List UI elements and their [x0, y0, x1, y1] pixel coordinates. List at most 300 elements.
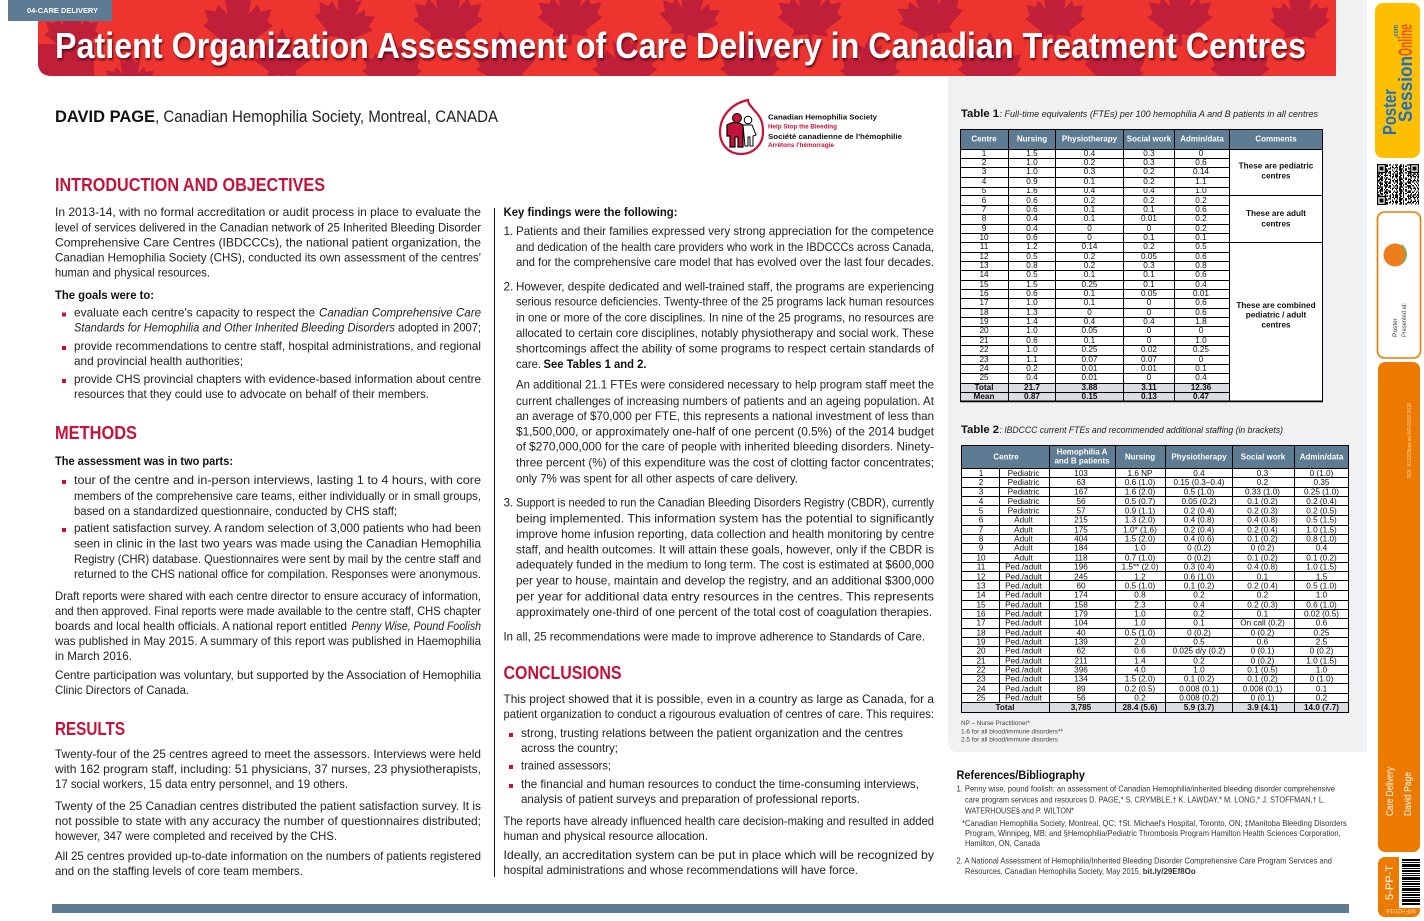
- finding 2: an average of $70,000 per FTE, this represents a national investment of less than: [516, 409, 934, 423]
- table 2 data rows: 56: [1076, 497, 1086, 506]
- table 2 data rows: [976, 469, 1339, 712]
- reference list: Resources, Canadian Hemophilia Society, May 2015,: [965, 867, 1141, 876]
- text block: introduction: human and physical resources.: [55, 266, 210, 280]
- text block: results: 17 social workers, 15 data entry personnel, and 19 others.: [55, 777, 348, 791]
- table 1 data rows: 20: [979, 326, 989, 335]
- logo text: Help Stop the Bleeding: [768, 124, 837, 130]
- finding 2: [504, 280, 935, 486]
- table 2 data rows: Ped./adult: [1005, 656, 1043, 665]
- table 2 data rows: 0.2: [1316, 693, 1328, 702]
- table 2 header row: Physiotherapy: [1171, 452, 1227, 462]
- table 1 data rows: 0: [1147, 326, 1152, 335]
- logo text: Canadian Hemophilia Society: [768, 112, 878, 122]
- table 2 data rows: Ped./adult: [1005, 637, 1043, 646]
- table 1 header row: Admin/data: [1180, 134, 1224, 144]
- category tag: [8, 0, 112, 21]
- text block: goals: The goals were to:: [55, 288, 154, 302]
- panel: results: [54, 718, 481, 878]
- table 2 data rows: 0.1: [1193, 618, 1205, 627]
- finding 3: 3.: [504, 496, 513, 510]
- table 2 data rows: 21: [976, 656, 986, 665]
- text block: conclusions: the financial and human resources to conduct the time-consuming interviews,: [521, 777, 919, 791]
- table 1 data rows: 0.05: [1141, 252, 1157, 261]
- sidebar: presented at box: Presented at:: [1401, 303, 1408, 337]
- table 2 data rows: 0.1 (0.2): [1184, 581, 1215, 590]
- text block: conclusions: Ideally, an accreditation system can be put in place which will be recognized by: [504, 848, 934, 862]
- table 2 data rows: 1: [979, 469, 984, 478]
- table 1 data rows: 0: [1147, 373, 1152, 382]
- heading: methods: METHODS: [55, 422, 137, 443]
- text block: assessment parts: patient satisfaction survey. A random selection of 3,000 patients who had been: [74, 521, 481, 535]
- table 2 data rows: 0.8: [1134, 590, 1146, 599]
- table 1 data rows: 19: [979, 317, 989, 326]
- table 1 data rows: 0: [1087, 224, 1092, 233]
- table 2 data rows: 158: [1074, 600, 1088, 609]
- text block: results: All 25 centres provided up-to-date information on the numbers of patients registered: [55, 849, 481, 863]
- text block: introduction: Comprehensive Care Centres (IBDCCCs), the national patient organization, the: [55, 236, 481, 250]
- table 2 data rows: 0.2 (0.5): [1306, 506, 1337, 515]
- sidebar: orange info panel: David Page: [1403, 772, 1414, 816]
- table 1 data rows: 9: [982, 224, 987, 233]
- table 2 data rows: 0.5 (1.0): [1306, 581, 1337, 590]
- finding 2: care.: [516, 357, 541, 371]
- references: [956, 770, 1347, 876]
- table 1 data rows: 0.1: [1084, 214, 1096, 223]
- table 1 data rows: 1.8: [1195, 317, 1207, 326]
- table 1 data rows: 0.5: [1026, 270, 1038, 279]
- logo: Canadian Hemophilia Society: [720, 100, 902, 154]
- table 1 data rows: 6: [982, 196, 987, 205]
- table 2 data rows: 0.05 (0.2): [1181, 497, 1217, 506]
- table 1 data rows: 0.6: [1026, 233, 1038, 242]
- finding 3: adequately funded in the medium to long term. The cost is estimated at $600,000: [516, 558, 934, 572]
- table 1 data rows: 7: [982, 205, 987, 214]
- table 1 data rows: 0.25: [1193, 345, 1209, 354]
- finding 2: An additional 21.1 FTEs were considered necessary to help program staff meet the: [516, 378, 934, 392]
- year tag: WFH2016: [1385, 907, 1416, 913]
- table 1 data rows: 0.1: [1084, 177, 1096, 186]
- table 1 header row: Nursing: [1017, 134, 1047, 144]
- table 1 data rows: 0.07: [1082, 355, 1098, 364]
- table 2 data rows: 196: [1074, 562, 1088, 571]
- text block: results: with 162 program staff, including: 51 physicians, 37 nurses, 23 physiotherapists,: [54, 762, 481, 776]
- table 2 data rows: 0.25 (1.0): [1304, 487, 1339, 496]
- panel: key findings: [504, 205, 935, 644]
- table 1 data rows: 0.14: [1193, 167, 1209, 176]
- table 2 data rows: 14.0 (7.7): [1304, 703, 1339, 712]
- table 2 footnotes: 2.5 for all blood/immune disorders: [961, 737, 1059, 744]
- text block: goals: adopted in 2007;: [398, 320, 481, 334]
- reference list: Hamilton, ON, Canada: [965, 839, 1040, 848]
- table 2 data rows: On call (0.2): [1240, 618, 1285, 627]
- text block: goals: Canadian Comprehensive Care: [319, 306, 481, 320]
- table 1 data rows: 3.11: [1141, 383, 1157, 392]
- table 1 data rows: 10: [979, 233, 989, 242]
- table 2 data rows: 1.3 (2.0): [1125, 515, 1156, 524]
- table 2 data rows: 14: [976, 590, 986, 599]
- table 2 data rows: Ped./adult: [1005, 562, 1043, 571]
- table 2 footnotes: 1.6 for all blood/immune disorders**: [961, 728, 1063, 735]
- table 2 data rows: 9: [979, 543, 984, 552]
- table 1 data rows: 21.7: [1024, 383, 1040, 392]
- table 1 data rows: 0: [1147, 298, 1152, 307]
- table 2 data rows: 0.33 (1.0): [1245, 487, 1280, 496]
- finding 2: See Tables 1 and 2.: [544, 357, 646, 371]
- table 1 data rows: 0.4: [1084, 149, 1096, 158]
- table 1 data rows: 2: [982, 158, 987, 167]
- session and author: Care Delivery: [1385, 767, 1396, 816]
- text block: results: Twenty of the 25 Canadian centres distributed the patient satisfaction survey. It is: [55, 799, 481, 813]
- text block: goals: provide recommendations to centre staff, hospital administrations, and regional: [74, 339, 481, 353]
- table 1 data rows: 0.3: [1143, 261, 1155, 270]
- table 1 caption: : Full-time equivalents (FTEs) per 100 hemophilia A and B patients in all centres: [1000, 109, 1318, 120]
- finding 2: current challenges of increasing numbers of patients and an ageing population. At: [516, 394, 935, 408]
- text block: introduction: In 2013-14, with no formal accreditation or audit process in place to evaluate the: [55, 205, 481, 219]
- table 2 data rows: 167: [1074, 487, 1088, 496]
- table 2 data rows: 0.5 (1.0): [1125, 628, 1156, 637]
- icon: blood drop with two figures: [720, 100, 763, 154]
- column divider: [494, 208, 496, 877]
- table 1 data rows: 24: [979, 364, 989, 373]
- text block: results: however, 347 were completed and received by the CHS.: [55, 829, 337, 843]
- table 2 data rows: 57: [1076, 506, 1086, 515]
- finding 2: 2.: [504, 280, 513, 294]
- finding 3: being implemented. This information system has the potential to significantly: [516, 512, 934, 526]
- table 2 data rows: 16: [976, 609, 986, 618]
- table 2 header row: and B patients: [1054, 456, 1110, 466]
- table 2 data rows: 0.6: [1316, 618, 1328, 627]
- table 2 data rows: 13: [976, 581, 986, 590]
- table 1 data rows: 12.36: [1191, 383, 1212, 392]
- table 1 data rows: 1.0: [1026, 345, 1038, 354]
- table 1 data rows: 0.02: [1141, 345, 1157, 354]
- table 2 data rows: 0.6: [1257, 637, 1269, 646]
- table 2 data rows: 2.5: [1316, 637, 1328, 646]
- table 2 data rows: 62: [1076, 646, 1086, 655]
- finding 3: per year for additional data entry resources in the centres. This represents: [516, 590, 934, 604]
- table 2 data rows: 0.2: [1193, 656, 1205, 665]
- table 2 data rows: 4.0: [1134, 665, 1146, 674]
- text block: draft reports: and then approved. Final reports were made available to the centre staff, CHS chapter: [55, 604, 481, 618]
- table 2 data rows: 175: [1074, 525, 1088, 534]
- table 2 data rows: 28.4 (5.6): [1122, 703, 1158, 712]
- subheading: key findings: Key findings were the following:: [504, 205, 678, 219]
- table 2 data rows: 1.6 NP: [1127, 469, 1153, 478]
- table 2 data rows: Ped./adult: [1005, 684, 1043, 693]
- table 2 data rows: 0.9 (1.1): [1125, 506, 1156, 515]
- table 2 data rows: 2: [979, 478, 984, 487]
- table 1 data rows: 5: [982, 186, 987, 195]
- table 2 data rows: 0.6: [1134, 646, 1146, 655]
- table 1 data rows: 0.3: [1143, 149, 1155, 158]
- table 1 data rows: 0.4: [1195, 280, 1207, 289]
- table 2 data rows: 0.4 (0.6): [1184, 534, 1215, 543]
- table 2 data rows: 0 (0.2): [1187, 543, 1211, 552]
- text block: goals: [55, 288, 481, 401]
- table 2 data rows: 3: [979, 487, 984, 496]
- table 2 data rows: 0.5 (1.5): [1306, 515, 1337, 524]
- table 2 data rows: 0.025 d/y (0.2): [1173, 646, 1226, 655]
- table 1 data rows: 15: [979, 280, 989, 289]
- table 1 data rows: 1.0: [1195, 336, 1207, 345]
- table 1 data rows: Mean: [974, 392, 994, 401]
- table 1 data rows: 0.87: [1024, 392, 1040, 401]
- table 1 data rows: 8: [982, 214, 987, 223]
- table 1 data rows: 16: [979, 289, 989, 298]
- table 2 data rows: 0.1 (0.2): [1184, 674, 1215, 683]
- text block: conclusions: trained assessors;: [521, 758, 611, 772]
- table 1 data rows: 0.05: [1082, 326, 1098, 335]
- reference list: care program services and resources D. PAGE,* S. CRYMBLE,† K. LAWDAY,* M. LONG,* J. STOFFMAN,† L.: [965, 796, 1325, 805]
- table 1 data rows: 22: [979, 345, 989, 354]
- table 2 data rows: 0.2: [1257, 590, 1269, 599]
- table 2 caption: Table 2: [961, 424, 999, 436]
- table 2 data rows: Ped./adult: [1005, 572, 1043, 581]
- table 2 header row: Hemophilia A: [1057, 448, 1108, 456]
- table 1 header row: [971, 134, 1297, 144]
- table 1 data rows: 0.2: [1195, 214, 1207, 223]
- table 1 data rows: 0.9: [1026, 177, 1038, 186]
- table 2 data rows: 0.5 (1.0): [1125, 581, 1156, 590]
- finding 2: only 7% was spent for all other aspects of care delivery.: [516, 472, 798, 486]
- table 1 comments column: centres: [1261, 320, 1291, 330]
- table 2 data rows: 3,785: [1071, 703, 1092, 712]
- table 2 data rows: 0.6 (1.0): [1125, 478, 1156, 487]
- panel: methods: [54, 422, 481, 697]
- table 2 data rows: Ped./adult: [1005, 618, 1043, 627]
- table 1 data rows: 0.2: [1195, 224, 1207, 233]
- text block: conclusions: This project showed that it is possible, even in a country as large as Canada, for a: [504, 692, 934, 706]
- table 2 data rows: 404: [1074, 534, 1088, 543]
- finding 2: in one or more of the core disciplines. In nine of the 25 programs, no resources are: [516, 310, 934, 324]
- table 2 data rows: 0.15 (0.3–0.4): [1174, 478, 1225, 487]
- table 2 data rows: 1.6 (2.0): [1125, 487, 1156, 496]
- table 2 data rows: 25: [976, 693, 986, 702]
- table 2 data rows: 0.2 (0.4): [1247, 581, 1278, 590]
- table 2 data rows: Adult: [1014, 534, 1034, 543]
- text block: conclusions: [504, 692, 934, 877]
- table 2 data rows: 0.1 (0.2): [1247, 674, 1278, 683]
- table 2 data rows: 0.7 (1.0): [1125, 553, 1156, 562]
- text block: conclusions: human and physical resource allocation.: [504, 829, 708, 843]
- text block: draft reports: Draft reports were shared with each centre director to ensure accuracy of information,: [55, 589, 481, 603]
- text block: participation: [55, 668, 481, 697]
- table 1 data rows: 0.1: [1084, 336, 1096, 345]
- table 1 data rows: 0.07: [1141, 355, 1157, 364]
- table 2 data rows: Adult: [1014, 543, 1034, 552]
- table 2 data rows: 1.0: [1316, 665, 1328, 674]
- table 2 data rows: Ped./adult: [1005, 581, 1043, 590]
- table 1 data rows: 0.6: [1195, 205, 1207, 214]
- table 2 data rows: 63: [1076, 478, 1086, 487]
- table 2 data rows: Pediatric: [1008, 487, 1039, 496]
- table 2 data rows: 0 (0.2): [1187, 628, 1211, 637]
- finding 2: of $270,000,000 for the care of people with inherited bleeding disorders. Ninety-: [516, 440, 934, 454]
- table 1 data rows: 0.4: [1195, 373, 1207, 382]
- table 2 data rows: 0.5 (1.0): [1184, 487, 1215, 496]
- table 1: [960, 130, 1323, 402]
- table 2 data rows: 0.4 (0.8): [1247, 562, 1278, 571]
- table 2 data rows: 1.0: [1134, 609, 1146, 618]
- text block: participation: Clinic Directors of Canada.: [55, 683, 189, 697]
- table 1 data rows: 1.2: [1026, 242, 1038, 251]
- table 1 data rows: 1.0: [1026, 167, 1038, 176]
- table 1 data rows: 0.1: [1084, 298, 1096, 307]
- table 1 data rows: 0.2: [1143, 196, 1155, 205]
- table 2 data rows: 0 (1.0): [1310, 469, 1334, 478]
- text block: assessment parts: based on a standardized questionnaire, conducted by CHS staff;: [74, 504, 397, 518]
- table 1 data rows: 0.8: [1195, 261, 1207, 270]
- table 2 header row: [993, 448, 1344, 466]
- table 2 data rows: 0.2 (0.5): [1125, 684, 1156, 693]
- table 1 data rows: 0.4: [1143, 186, 1155, 195]
- table 1 data rows: 0.6: [1026, 336, 1038, 345]
- table 1 comments column: These are adult: [1246, 209, 1306, 218]
- table 2 data rows: 0.25: [1314, 628, 1330, 637]
- table 2 data rows: 1.0: [1134, 543, 1146, 552]
- table 2 data rows: 2.0: [1134, 637, 1146, 646]
- text block: conclusions: across the country;: [521, 741, 618, 755]
- text block: goals: evaluate each centre's capacity to respect the: [74, 306, 315, 320]
- finding 1: and for the comprehensive care model that has evolved over the last four decades.: [516, 255, 934, 269]
- table 2 data rows: 0.2 (0.3): [1247, 600, 1278, 609]
- DOI: DOI: 10.3252/pso.eu.WFH2016.2016: [1407, 403, 1413, 478]
- table 2 data rows: 1.0: [1193, 665, 1205, 674]
- sidebar: poster code and barcode: [1378, 857, 1421, 917]
- table 1 data rows: [974, 149, 1212, 401]
- table 1 data rows: 0.1: [1084, 270, 1096, 279]
- table 1 data rows: 0.3: [1143, 158, 1155, 167]
- table 1 header row: Social work: [1127, 134, 1172, 144]
- table 1 data rows: 11: [980, 242, 989, 251]
- panel: conclusions: [504, 662, 934, 877]
- table 1 data rows: 0.4: [1026, 224, 1038, 233]
- table 2 footnotes: [961, 720, 1063, 744]
- finding 1: and dedication of the health care providers who work in the IBDCCCs across Canada,: [516, 240, 934, 254]
- table 2 data rows: 0.3 (0.4): [1184, 562, 1215, 571]
- text block: draft reports: [54, 589, 481, 663]
- text block: goals: and provincial health authorities;: [74, 354, 243, 368]
- table 2 data rows: 23: [976, 674, 986, 683]
- table 2 data rows: 0.3: [1257, 469, 1269, 478]
- reference list: 1. Penny wise, pound foolish: an assessment of Canadian Hemophilia/inherited bleeding disorder comprehensive: [956, 784, 1335, 794]
- table 1 data rows: 17: [979, 298, 989, 307]
- table 1 data rows: 0: [1147, 308, 1152, 317]
- table 2 data rows: Adult: [1014, 525, 1034, 534]
- text block: results: not possible to state with any accuracy the number of questionnaires distributed;: [55, 814, 481, 828]
- table 2 data rows: 17: [976, 618, 986, 627]
- table 1 data rows: 0: [1147, 336, 1152, 345]
- table 2 data rows: 5.9 (3.7): [1184, 703, 1215, 712]
- table 2 data rows: 5: [979, 506, 984, 515]
- table 2 data rows: 8: [979, 534, 984, 543]
- text block: assessment parts: returned to the CHS national office for compilation. Responses were anonymous.: [74, 567, 481, 581]
- text block: conclusions: The reports have already influenced health care decision-making and resulted in added: [504, 814, 934, 828]
- table 1 comments column: [1236, 162, 1316, 330]
- table 2 data rows: 0.1: [1316, 684, 1328, 693]
- table 2 data rows: 0.2: [1257, 478, 1269, 487]
- table 2 data rows: 10: [976, 553, 986, 562]
- table 2 data rows: 60: [1076, 581, 1086, 590]
- sidebar: PosterSessionOnline logo: Poster: [1380, 89, 1400, 135]
- table 2 data rows: 1.0 (1.5): [1306, 562, 1337, 571]
- table 2 data rows: 104: [1074, 618, 1088, 627]
- table 2 data rows: 211: [1074, 656, 1088, 665]
- finding 1: [504, 224, 934, 269]
- table 1 data rows: 1.0: [1026, 298, 1038, 307]
- table 2 data rows: 15: [976, 600, 986, 609]
- table 2: [962, 446, 1348, 712]
- table 2 data rows: 1.5** (2.0): [1122, 562, 1159, 571]
- table 2 data rows: 19: [976, 637, 986, 646]
- table 1 data rows: 0.01: [1082, 364, 1098, 373]
- sidebar: orange info panel: [1378, 362, 1420, 852]
- table 2 data rows: 7: [979, 525, 984, 534]
- text block: draft reports: boards and local health officials. A national report entitled: [55, 619, 347, 633]
- finding 3: per year to house, maintain and develop the registry, and an additional $300,000: [516, 574, 934, 588]
- table 2 data rows: Ped./adult: [1005, 600, 1043, 609]
- table 1 data rows: 0: [1199, 355, 1204, 364]
- table 2 data rows: 0 (0.2): [1310, 646, 1334, 655]
- table 1 data rows: 0.25: [1082, 280, 1098, 289]
- table 1 data rows: 0.1: [1143, 205, 1155, 214]
- text block: assessment parts: seen in clinic in the last two years was made using the Canadian Hemophilia: [74, 536, 481, 550]
- table 2 data rows: 40: [1076, 628, 1086, 637]
- table 1 data rows: 0.2: [1143, 242, 1155, 251]
- author line: , Canadian Hemophilia Society, Montreal, CANADA: [155, 107, 499, 126]
- table 2 data rows: Total: [996, 703, 1014, 712]
- table 2 data rows: Ped./adult: [1005, 674, 1043, 683]
- text block: assessment parts: The assessment was in two parts:: [55, 454, 233, 468]
- table 2 data rows: 0.4 (0.8): [1247, 515, 1278, 524]
- reference list: bit.ly/29Ef8Oo: [1143, 867, 1196, 876]
- table 2 data rows: 0.4: [1193, 600, 1205, 609]
- table 2 header row: Nursing: [1125, 452, 1155, 462]
- table 1 data rows: 0.4: [1143, 317, 1155, 326]
- table 1 data rows: 0.6: [1195, 308, 1207, 317]
- table 1 data rows: Total: [975, 383, 993, 392]
- finding 2: However, despite dedicated and well-trained staff, the programs are experiencing: [516, 280, 934, 294]
- table 1 data rows: 1: [982, 149, 987, 158]
- table 1 data rows: 12: [979, 252, 989, 261]
- table 2 data rows: 12: [976, 572, 986, 581]
- table 2 data rows: 0 (0.2): [1251, 628, 1275, 637]
- table 2 data rows: 1.0 (1.5): [1306, 656, 1337, 665]
- table 2 data rows: 1.5 (2.0): [1125, 534, 1156, 543]
- table 2 data rows: 0.5: [1193, 637, 1205, 646]
- sidebar: QR code: [1377, 164, 1419, 205]
- table 2 data rows: 0.5 (0.7): [1125, 497, 1156, 506]
- table 1 data rows: 0: [1087, 308, 1092, 317]
- finding 3: approximately one-third of one percent of the total cost of coagulation therapies.: [516, 605, 932, 619]
- table 2 data rows: 11: [977, 562, 986, 571]
- reference list: 2. A National Assessment of Hemophilia/Inherited Bleeding Disorder Comprehensive Care Program Services and: [956, 856, 1332, 865]
- table 1 data rows: 0.6: [1195, 270, 1207, 279]
- text block: conclusions: strong, trusting relations between the patient organization and the centres: [521, 726, 903, 740]
- table 2 footnotes: NP – Nurse Practitioner*: [961, 720, 1030, 727]
- barcode: [1402, 859, 1420, 905]
- table 1 data rows: 0: [1147, 224, 1152, 233]
- table 2 data rows: 1.0: [1134, 618, 1146, 627]
- heading: conclusions: CONCLUSIONS: [504, 662, 622, 683]
- finding 2: shortcomings affect the ability of some programs to respect certain standards of: [516, 342, 935, 356]
- presented at text: Poster: [1392, 317, 1399, 337]
- text block: conclusions: hospital administrations and whose recommendations will have force.: [504, 863, 858, 877]
- table 1 data rows: 0.5: [1195, 242, 1207, 251]
- table 2 data rows: 0.2: [1193, 590, 1205, 599]
- table 2 data rows: 179: [1074, 609, 1088, 618]
- sidebar: poster code and barcode: 5-PP-T: [1384, 865, 1396, 900]
